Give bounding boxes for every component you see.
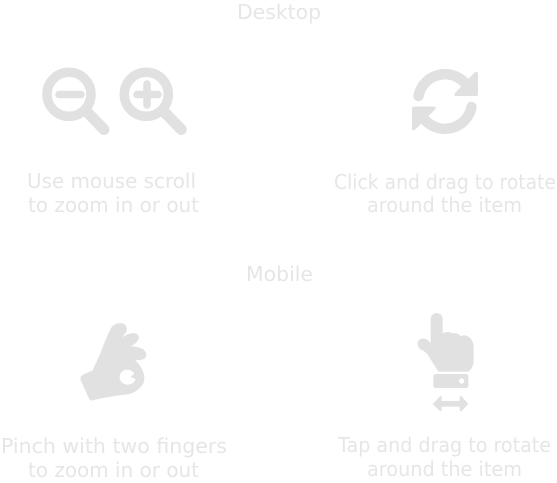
text: mobile zoom instruction: to zoom in or out — [28, 458, 199, 482]
text: desktop rotate instruction — [334, 170, 556, 217]
heading: Mobile: Mobile — [246, 262, 313, 286]
text: mobile zoom instruction — [1, 434, 227, 482]
text: mobile rotate instruction: around the item — [367, 457, 522, 481]
icon: pinch hand — [81, 323, 146, 400]
icon: zoom in magnifier — [124, 72, 181, 130]
icon: rotate arrows — [412, 72, 478, 130]
text: mobile zoom instruction: Pinch with two fingers — [1, 434, 227, 458]
icon part: horizontal arrow — [433, 396, 468, 411]
heading: Desktop: Desktop — [237, 0, 321, 24]
text: mobile rotate instruction — [337, 433, 551, 481]
text: desktop zoom instruction: to zoom in or out — [28, 193, 199, 217]
icon part: pointing hand — [418, 313, 474, 372]
icon: pointing hand with drag arrow — [418, 313, 474, 411]
text: mobile rotate instruction: Tap and drag to rotate — [337, 433, 551, 457]
icon: zoom out magnifier — [47, 72, 104, 130]
icon part: cuff — [433, 374, 468, 388]
text: desktop zoom instruction — [27, 169, 199, 217]
text: desktop zoom instruction: Use mouse scroll — [27, 169, 196, 193]
text: desktop rotate instruction: around the item — [367, 193, 522, 217]
